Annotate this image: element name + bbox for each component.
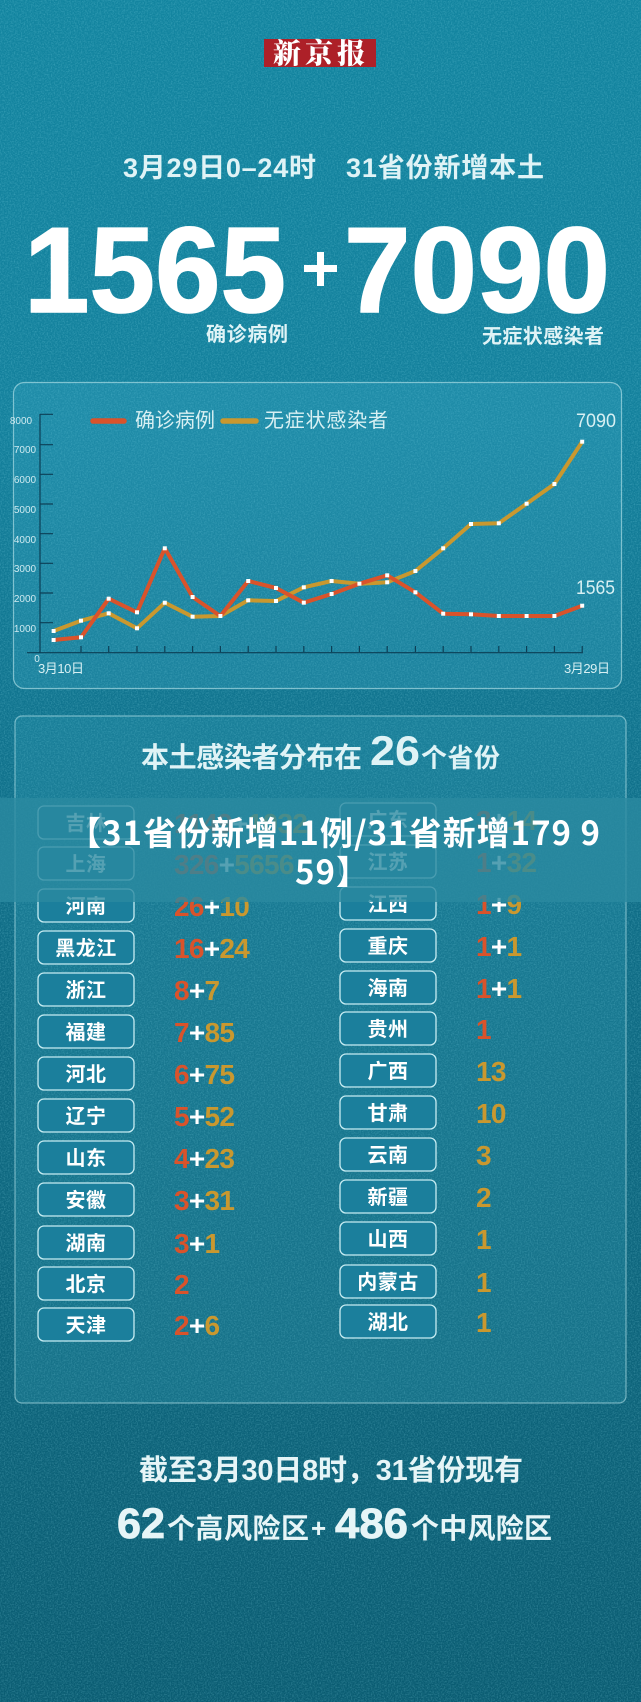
- row: 广西: [340, 1054, 506, 1087]
- panel: province distribution: [15, 716, 626, 1403]
- row: 北京: 2: [174, 1269, 189, 1300]
- label: asymptomatic cases: 无症状感染者: [482, 325, 604, 348]
- row: 吉林: [38, 806, 307, 839]
- row: 山东: 4+23: [174, 1143, 234, 1174]
- end value: 7090: 7090: [576, 411, 616, 432]
- y axis labels: 5000: [14, 505, 37, 516]
- row: 湖北: 湖北: [368, 1311, 408, 1334]
- row: 天津: 天津: [66, 1314, 106, 1337]
- row: 河南: 26+10: [174, 891, 249, 922]
- panel heading: [141, 727, 500, 774]
- row: 北京: 北京: [66, 1272, 106, 1296]
- row: 湖北: 1: [476, 1307, 491, 1338]
- row: 海南: 1+1: [476, 973, 522, 1004]
- label: confirmed cases: 确诊病例: [206, 323, 288, 346]
- row: 河北: 6+75: [174, 1059, 234, 1090]
- footer text: risk area counts: 个中风险区: [411, 1513, 552, 1544]
- row: 新疆: 新疆: [368, 1186, 408, 1209]
- row: 广东: 广东: [368, 808, 408, 832]
- panel: trend chart: [10, 382, 622, 688]
- y axis labels: 6000: [14, 475, 37, 486]
- row: 黑龙江: 16+24: [174, 933, 250, 964]
- panel heading: 个省份: [421, 743, 500, 773]
- row: 海南: 海南: [368, 977, 408, 1000]
- line: confirmed: [54, 548, 582, 640]
- row: 福建: [38, 1015, 234, 1048]
- row: 安徽: 安徽: [66, 1189, 106, 1212]
- row: 黑龙江: [38, 931, 250, 964]
- row: 甘肃: [340, 1096, 506, 1129]
- row: 浙江: 8+7: [174, 975, 220, 1006]
- row: 江西: 1+9: [476, 889, 522, 920]
- row: 河南: [38, 889, 249, 922]
- rows: right column: [340, 803, 537, 1338]
- data markers: [52, 440, 584, 642]
- plus sign: [304, 252, 337, 286]
- row: 广西: 广西: [368, 1060, 408, 1083]
- row: 内蒙古: 内蒙古: [357, 1271, 419, 1294]
- row: 辽宁: 辽宁: [66, 1104, 106, 1128]
- y axis labels: [10, 416, 40, 665]
- row: 云南: [340, 1138, 491, 1171]
- row: 贵州: [340, 1012, 491, 1045]
- row: 湖南: 湖南: [66, 1232, 106, 1255]
- headline: [123, 153, 544, 183]
- row: 山西: 1: [476, 1224, 491, 1255]
- row: 辽宁: 5+52: [174, 1101, 234, 1132]
- y axis labels: 4000: [14, 535, 37, 546]
- row: 江苏: 1+32: [476, 847, 536, 878]
- legend: 确诊病例: [135, 409, 215, 432]
- row: 福建: 7+85: [174, 1017, 234, 1048]
- row: 江西: [340, 887, 522, 920]
- row: 广东: 3+14: [476, 805, 537, 836]
- panel heading: 本土感染者分布在: [141, 742, 362, 773]
- chart axes: [27, 414, 583, 653]
- overlay banner: 【31省份新增11例/31省新增179 9: [68, 807, 600, 855]
- row: 安徽: [38, 1183, 234, 1216]
- line: asymptomatic: [54, 442, 582, 631]
- row: 重庆: 重庆: [368, 935, 408, 958]
- row: 云南: 云南: [368, 1144, 408, 1167]
- row: 贵州: 贵州: [368, 1018, 408, 1041]
- row: 湖北: [340, 1305, 491, 1338]
- big number: asymptomatic: 7090: [344, 202, 610, 338]
- row: 甘肃: 甘肃: [368, 1102, 408, 1125]
- row: 山西: 山西: [368, 1228, 408, 1251]
- end value: 1565: 1565: [576, 578, 615, 599]
- y axis labels: 1000: [14, 624, 37, 635]
- y axis labels: 8000: [10, 416, 33, 427]
- row: 上海: 326+5656: [174, 849, 294, 880]
- row: 河北: [38, 1057, 234, 1090]
- row: 江苏: 江苏: [368, 851, 408, 874]
- row: 河北: 河北: [66, 1063, 106, 1086]
- logo: 新京报: 新京报: [273, 32, 369, 72]
- row: 内蒙古: [340, 1265, 491, 1298]
- rows: left column: [38, 806, 307, 1341]
- footer text: risk area counts: 486: [335, 1500, 408, 1548]
- row: 吉林: 吉林: [66, 812, 106, 835]
- row: 云南: 3: [476, 1140, 491, 1171]
- row: 海南: [340, 971, 522, 1004]
- row: 福建: 福建: [66, 1021, 106, 1044]
- row: 重庆: 1+1: [476, 931, 522, 962]
- x label: end date: 3月29日: [564, 661, 610, 676]
- legend: 无症状感染者: [264, 409, 388, 432]
- row: 天津: [38, 1308, 220, 1341]
- row: 上海: [38, 847, 294, 880]
- row: 甘肃: 10: [476, 1098, 506, 1129]
- row: 黑龙江: 黑龙江: [55, 937, 117, 960]
- row: 北京: [38, 1267, 189, 1300]
- row: 上海: 上海: [66, 853, 106, 876]
- row: 广西: 13: [476, 1056, 506, 1087]
- big number: confirmed: 1565: [24, 202, 286, 338]
- row: 浙江: [38, 973, 220, 1006]
- footer text: risk area counts: 62: [117, 1500, 165, 1548]
- y axis labels: 2000: [14, 594, 37, 605]
- row: 广东: [340, 803, 537, 836]
- overlay banner: 59】: [295, 846, 370, 894]
- panel heading: 26: [370, 727, 420, 774]
- row: 湖南: 3+1: [174, 1228, 220, 1259]
- row: 吉林: 1149+1032: [174, 808, 307, 839]
- row: 安徽: 3+31: [174, 1185, 234, 1216]
- row: 新疆: 2: [476, 1182, 491, 1213]
- row: 山西: [340, 1222, 491, 1255]
- footer text: risk area counts: +: [311, 1513, 326, 1543]
- row: 浙江: 浙江: [66, 979, 106, 1002]
- row: 内蒙古: 1: [476, 1267, 491, 1298]
- footer text: risk area intro: 截至3月30日8时，31省份现有: [139, 1454, 523, 1487]
- row: 江西: 江西: [368, 893, 408, 916]
- row: 天津: 2+6: [174, 1310, 220, 1341]
- row: 贵州: 1: [476, 1014, 491, 1045]
- footer text: risk area counts: 个高风险区: [167, 1513, 309, 1544]
- x label: start date: 3月10日: [38, 661, 84, 676]
- headline: 31省份新增本土: [346, 153, 544, 183]
- row: 江苏: [340, 845, 536, 878]
- y axis labels: 0: [34, 654, 40, 665]
- headline: 3月29日0–24时: [123, 153, 316, 183]
- row: 山东: [38, 1141, 234, 1174]
- legend: [93, 409, 388, 432]
- overlay banner: [0, 798, 641, 902]
- row: 重庆: [340, 929, 522, 962]
- row: 新疆: [340, 1180, 491, 1213]
- row: 辽宁: [38, 1099, 234, 1132]
- row: 湖南: [38, 1226, 220, 1259]
- row: 山东: 山东: [66, 1146, 106, 1170]
- row: 河南: 河南: [66, 895, 106, 918]
- footer text: risk area counts: [117, 1500, 552, 1548]
- y axis labels: 7000: [14, 445, 37, 456]
- y axis labels: 3000: [14, 564, 37, 575]
